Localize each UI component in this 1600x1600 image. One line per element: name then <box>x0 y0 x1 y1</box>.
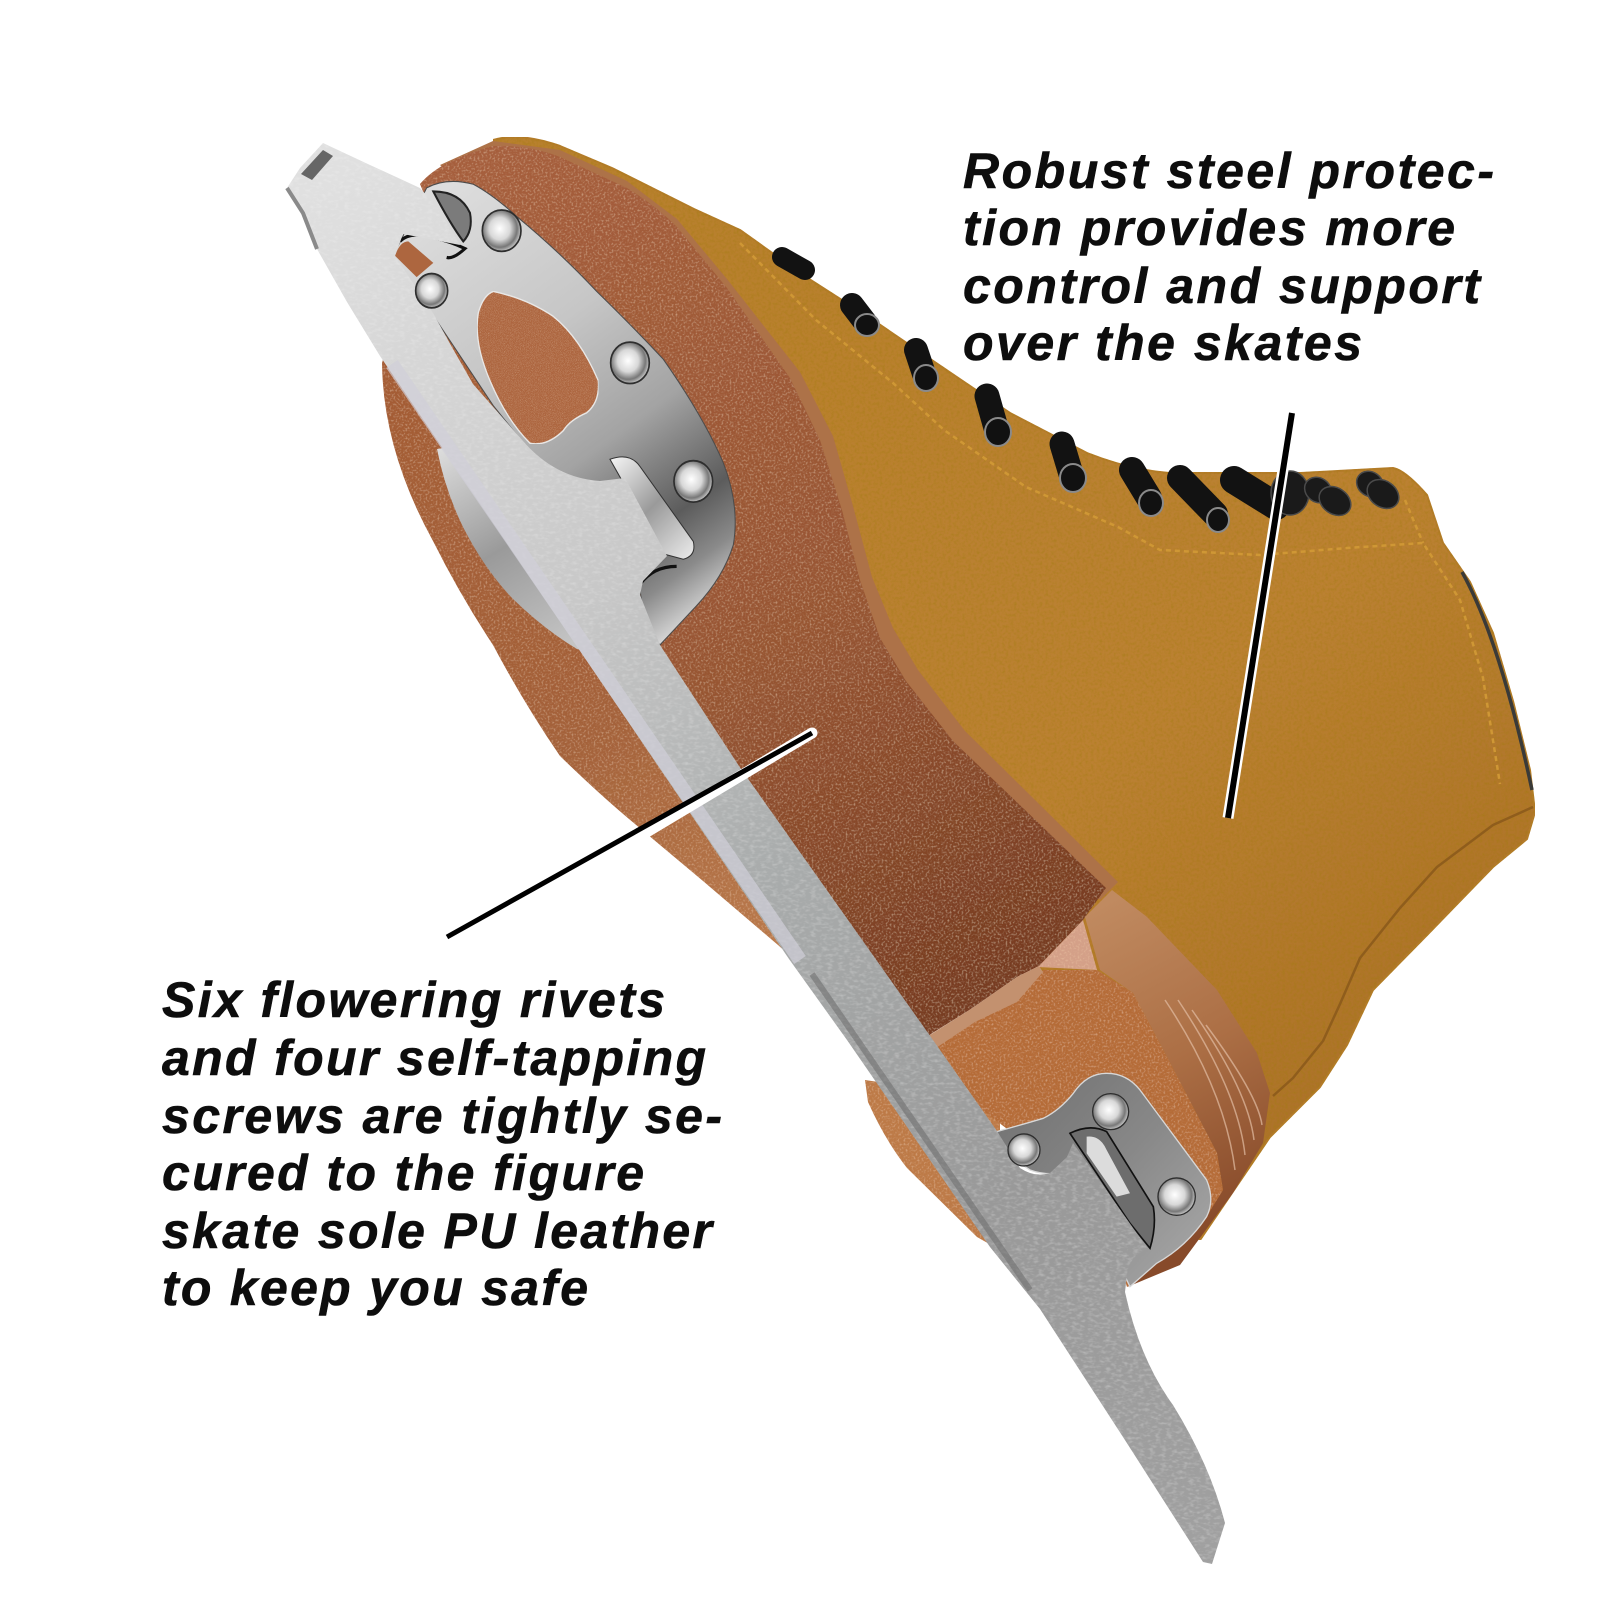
stitching <box>740 243 1500 784</box>
text: steel protection: over the skates <box>963 315 1362 371</box>
heel collar dark edge <box>1462 572 1532 790</box>
toe hollow plate behind blade <box>437 440 620 660</box>
text: rivets and screws: screws are tightly se- <box>162 1088 722 1144</box>
toe plate rivets <box>416 210 713 502</box>
sole plate <box>420 146 1106 1060</box>
skate boot upper <box>493 137 1535 1240</box>
heel face <box>922 920 1223 1287</box>
heel seam <box>1273 807 1533 1096</box>
blade tip notches <box>301 150 333 180</box>
heel plate rivets <box>1008 1094 1195 1215</box>
blade bevel <box>392 364 800 960</box>
plate opening <box>477 291 598 444</box>
heel stanchion <box>1070 1128 1154 1248</box>
toe mounting plate <box>393 181 735 645</box>
heel breast highlight <box>1038 920 1097 970</box>
steel blade <box>287 143 1225 1564</box>
text: rivets and screws: skate sole PU leather <box>162 1203 715 1259</box>
laces and eyelets <box>782 257 1404 532</box>
text: rivets and screws: and four self-tapping <box>162 1030 706 1086</box>
text: steel protection: tion provides more <box>963 200 1455 256</box>
stanchion <box>610 457 694 559</box>
text: rivets and screws: Six flowering rivets <box>162 972 665 1028</box>
heel left of blade <box>865 1080 1000 1250</box>
heel mounting plate <box>997 1073 1211 1287</box>
text: steel protection <box>963 143 1494 371</box>
heel side band <box>1085 890 1270 1287</box>
eyelet rims <box>855 314 1229 532</box>
text: steel protection: control and support <box>963 258 1482 314</box>
upper opening <box>433 191 471 241</box>
plate slot <box>395 241 433 277</box>
sole left of blade <box>382 240 870 1000</box>
callout line to sole <box>447 733 812 937</box>
breast rim <box>922 966 1043 1052</box>
callout line to boot <box>1228 413 1292 818</box>
text: rivets and screws: to keep you safe <box>162 1260 588 1316</box>
text: steel protection: Robust steel protec- <box>963 143 1494 199</box>
text: rivets and screws <box>162 972 722 1316</box>
sole side rim <box>440 141 1118 900</box>
text: rivets and screws: cured to the figure <box>162 1145 644 1201</box>
